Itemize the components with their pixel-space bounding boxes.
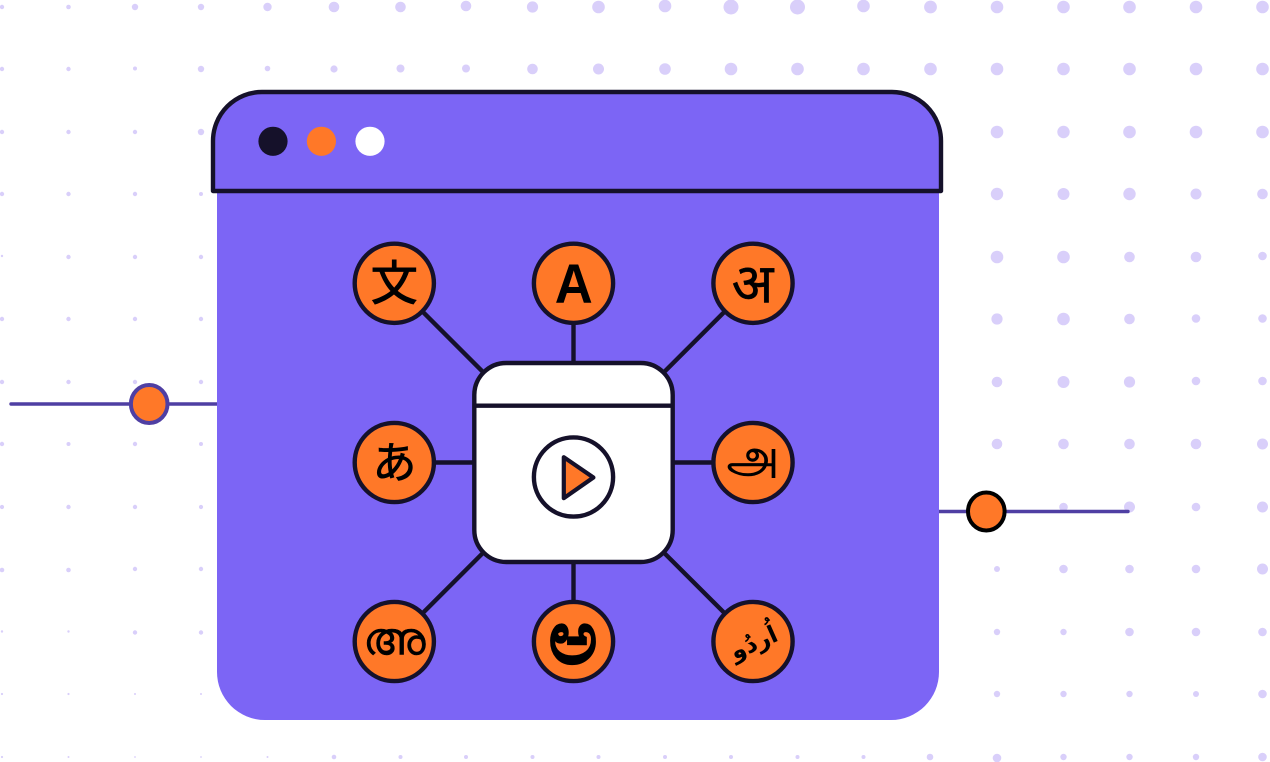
spokes connecting languages to video [394,283,753,642]
window control dots [258,127,385,156]
language badge: Tamil: அ [727,429,779,482]
language badge: Japanese [355,423,434,502]
icon: play button [534,437,613,517]
language badge: Urdu [713,602,793,681]
language badge: Malayalam: അ [363,612,426,664]
language badge: Hindi [713,244,793,323]
language badge: Kannada: ಅ [549,596,597,679]
language badge: Chinese [355,244,434,323]
language badge: Tamil [713,423,793,502]
language badge: Chinese: 文 [370,258,418,311]
language badge: Japanese: あ [372,439,416,488]
window title bar [213,92,941,191]
central video player card [474,363,673,562]
language badge: Latin [534,244,613,323]
window body [217,185,939,720]
language badge: Kannada [534,596,613,681]
right connector line with node [938,492,1128,530]
browser window [213,92,941,720]
left connector line with node [11,385,218,423]
language badge: Hindi: अ [731,252,774,314]
language badge: Latin: A [555,252,593,315]
language badge: Urdu: اُردُو [723,616,782,666]
language badge: Malayalam [355,602,434,681]
